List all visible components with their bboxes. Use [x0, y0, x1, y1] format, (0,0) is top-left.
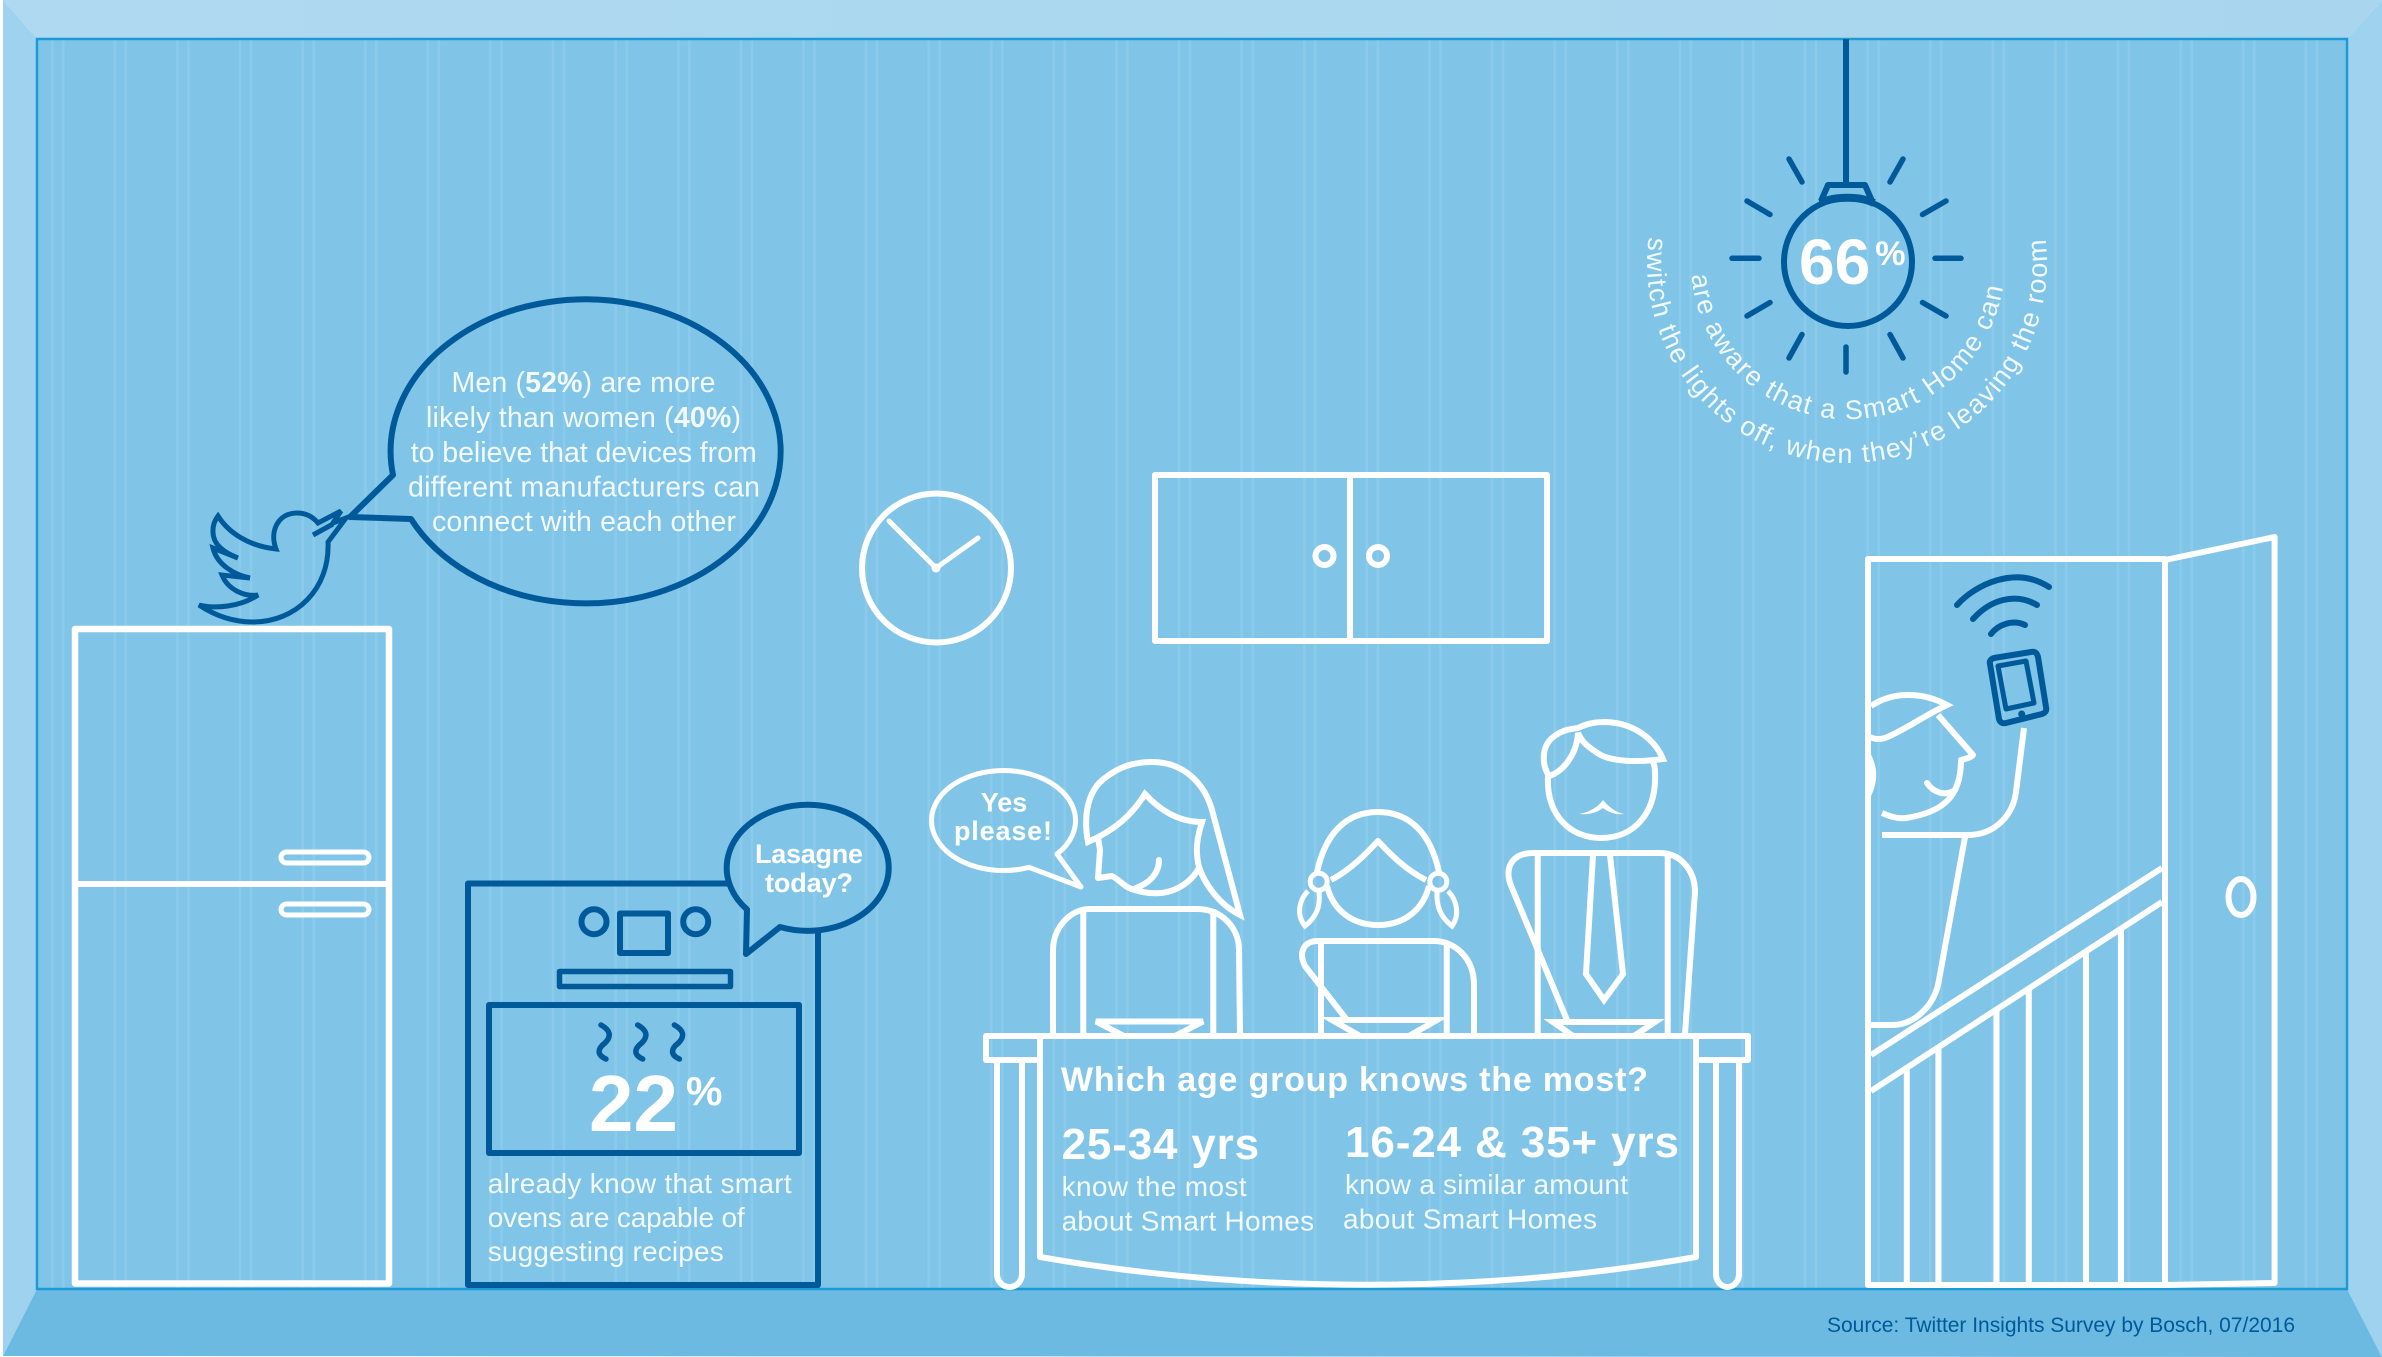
light rays	[1732, 159, 1961, 372]
balusters	[1907, 928, 2121, 1285]
age group left: 25-34 yrs	[1062, 1120, 1259, 1169]
age group right: about Smart Homes	[1343, 1204, 1597, 1235]
source line: Source: Twitter Insights Survey by Bosch, 07/2016	[1827, 1314, 2295, 1337]
curved lamp caption: are aware that a Smart Home can	[1692, 275, 2003, 420]
callout text: Men (52%) are more	[452, 367, 716, 399]
icon: twitter bird	[199, 511, 346, 622]
speech bubble	[350, 299, 781, 603]
woman	[1053, 762, 1240, 1036]
wall cabinet	[1155, 475, 1547, 641]
ceiling lamp	[1732, 39, 1961, 372]
age group right	[1343, 1118, 1679, 1235]
speech bubble: lasagne: today?	[765, 868, 853, 898]
oven door	[489, 1005, 799, 1153]
bulb	[1784, 198, 1912, 326]
speech bubble: lasagne	[727, 805, 889, 954]
head and hair	[1870, 695, 1947, 739]
lamp cord and cap	[1843, 39, 1849, 185]
stair rail	[1871, 868, 2162, 1091]
oven caption	[488, 1168, 792, 1267]
table legs	[997, 1060, 1739, 1287]
icon: smartphone	[1990, 652, 2046, 723]
66 percent: %	[1875, 235, 1905, 273]
age group left: about Smart Homes	[1062, 1206, 1314, 1237]
ear	[1865, 745, 1876, 806]
door knob	[2228, 879, 2254, 915]
callout text: connect with each other	[432, 506, 736, 538]
age group right: know a similar amount	[1345, 1169, 1628, 1200]
table top	[986, 1036, 1748, 1060]
age group left	[1062, 1120, 1314, 1237]
table	[986, 1036, 1748, 1287]
callout: men vs women	[350, 299, 781, 603]
callout text: different manufacturers can	[408, 472, 760, 504]
oven dials and display	[582, 909, 606, 934]
oven caption: suggesting recipes	[488, 1236, 724, 1267]
fridge	[75, 629, 389, 1284]
girl	[1300, 812, 1474, 1036]
callout text: to believe that devices from	[411, 437, 757, 469]
age group left: know the most	[1062, 1171, 1247, 1202]
speech bubble: yes please: Yes	[981, 788, 1027, 818]
speech bubble: yes please: please!	[954, 816, 1052, 846]
steam	[599, 1025, 683, 1059]
22 percent: %	[686, 1068, 722, 1114]
66 percent: 66	[1799, 226, 1870, 298]
arm	[1882, 728, 2024, 835]
banner heading: Which age group knows the most?	[1061, 1061, 1648, 1099]
oven caption: already know that smart	[488, 1168, 792, 1199]
door frame	[1868, 559, 2165, 1285]
callout text: likely than women (40%)	[426, 402, 741, 434]
oven	[468, 884, 818, 1285]
doorway and stairs	[1868, 537, 2275, 1285]
clock	[862, 494, 1011, 642]
oven body	[468, 884, 818, 1285]
callout text	[408, 367, 760, 538]
oven caption: ovens are capable of	[488, 1202, 745, 1233]
age group right: 16-24 & 35+ yrs	[1345, 1118, 1679, 1167]
speech bubble: yes please	[931, 771, 1081, 887]
table banner	[1040, 1036, 1696, 1285]
22 percent: 22	[589, 1059, 678, 1148]
man	[1509, 722, 1695, 1036]
icon: wifi signal	[1957, 577, 2049, 634]
speech bubble: lasagne: Lasagne	[755, 839, 863, 869]
curved lamp caption: switch the lights off, when they’re leaving the room	[1647, 238, 2048, 463]
person on stairs	[1865, 695, 2024, 1025]
open door	[2165, 537, 2275, 1285]
body	[1866, 837, 1965, 1025]
